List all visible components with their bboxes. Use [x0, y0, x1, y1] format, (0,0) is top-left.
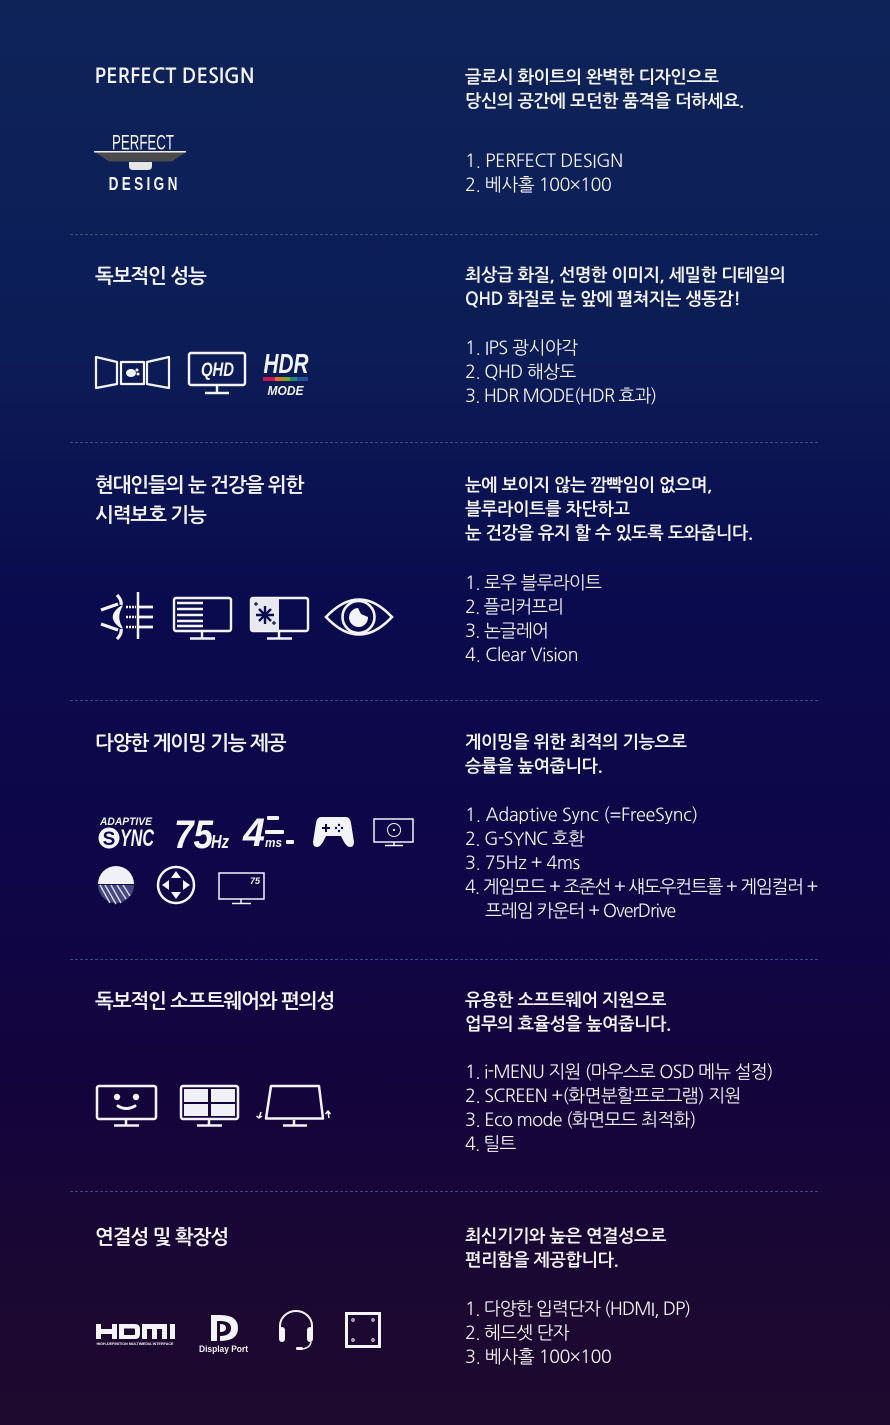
icon: IPS wide viewing angle — [96, 357, 169, 388]
list: gaming — [465, 806, 818, 920]
icon: QHD monitor: QHD — [201, 360, 234, 381]
heading: eye care: 현대인들의 눈 건강을 위한 — [95, 475, 303, 495]
icon: VESA mount — [346, 1314, 380, 1346]
icon: HDMI logo — [96, 1324, 175, 1346]
summary: eye care: 블루라이트를 차단하고 — [465, 500, 630, 518]
icon: crosshair monitor — [374, 819, 413, 846]
icon: clear vision eye — [326, 600, 392, 634]
list: software — [465, 1062, 773, 1152]
icon: flicker free monitor — [174, 598, 231, 638]
summary: performance — [465, 266, 785, 308]
summary: perfect design: 당신의 공간에 모던한 품격을 더하세요. — [465, 92, 744, 110]
list: gaming: 3. 75Hz + 4ms — [465, 854, 580, 872]
list: eye care — [465, 574, 602, 664]
list: software: 3. Eco mode (화면모드 최적화) — [465, 1110, 696, 1128]
summary: connectivity: 편리함을 제공합니다. — [465, 1251, 618, 1269]
list: perfect design: 2. 베사홀 100×100 — [465, 176, 611, 194]
list: performance: 1. IPS 광시야각 — [465, 338, 578, 356]
heading: perfect design: PERFECT DESIGN — [94, 66, 254, 86]
icon: shadow control — [98, 866, 134, 904]
heading: performance: 독보적인 성능 — [95, 266, 206, 286]
heading: connectivity: 연결성 및 확장성 — [95, 1227, 228, 1247]
icon: low blue light eye — [101, 592, 153, 639]
icon: smile monitor — [97, 1086, 156, 1126]
icon: frame counter monitor: 75 — [250, 876, 261, 886]
summary: eye care — [465, 476, 753, 542]
summary: gaming — [465, 733, 687, 775]
list: performance: 2. QHD 해상도 — [465, 362, 576, 380]
icon: 75Hz: Hz — [211, 832, 229, 852]
list: eye care: 4. Clear Vision — [465, 646, 578, 664]
summary: eye care: 눈에 보이지 않는 깜빡임이 없으며, — [465, 476, 712, 494]
list: gaming: 4. 게임모드 + 조준선 + 섀도우컨트롤 + 게임컬러 + — [465, 878, 817, 896]
summary: eye care: 눈 건강을 유지 할 수 있도록 도와줍니다. — [465, 524, 753, 542]
icon: DisplayPort logo: Display Port — [199, 1344, 249, 1355]
summary: performance: QHD 화질로 눈 앞에 펼쳐지는 생동감! — [465, 290, 740, 308]
list: eye care: 1. 로우 블루라이트 — [465, 574, 601, 592]
summary: connectivity: 최신기기와 높은 연결성으로 — [465, 1227, 666, 1245]
summary: gaming: 승률을 높여줍니다. — [465, 757, 602, 775]
list: eye care: 3. 논글레어 — [465, 622, 548, 640]
list: gaming: 1. Adaptive Sync (=FreeSync) — [465, 806, 698, 824]
list: performance — [465, 338, 656, 404]
list: gaming: 2. G-SYNC 호환 — [465, 830, 584, 848]
icon: adaptive sync: YNC — [120, 825, 154, 852]
icon: screen split monitor — [181, 1086, 238, 1126]
icon: 4ms: ms — [265, 835, 282, 850]
list: software: 4. 틸트 — [465, 1134, 515, 1152]
summary: perfect design: 글로시 화이트의 완벽한 디자인으로 — [465, 68, 719, 86]
list: connectivity: 1. 다양한 입력단자 (HDMI, DP) — [465, 1300, 690, 1318]
list: connectivity: 3. 베사홀 100×100 — [465, 1348, 611, 1366]
icon: HDMI logo: HIGH-DEFINITION MULTIMEDIA INTERFACE — [96, 1341, 174, 1346]
icon: QHD monitor — [189, 353, 245, 393]
icon: 75Hz: 75 — [174, 813, 214, 857]
summary: connectivity — [465, 1227, 666, 1269]
icon: HDR mode: HDR — [264, 348, 309, 379]
icon: headset — [279, 1311, 313, 1350]
heading: gaming: 다양한 게이밍 기능 제공 — [95, 733, 286, 753]
icon: frame counter monitor — [219, 873, 264, 904]
list: connectivity: 2. 헤드셋 단자 — [465, 1324, 569, 1342]
icon: tilt monitor — [256, 1086, 330, 1126]
icon: gamepad — [313, 817, 354, 847]
summary: gaming: 게이밍을 위한 최적의 기능으로 — [465, 733, 687, 751]
summary: software — [465, 991, 671, 1033]
list: software: 2. SCREEN +(화면분할프로그램) 지원 — [465, 1086, 741, 1104]
icon: 4ms — [242, 811, 294, 855]
icon: HDR mode: MODE — [268, 383, 304, 398]
icon: adaptive sync: ADAPTIVE — [99, 816, 153, 828]
summary: performance: 최상급 화질, 선명한 이미지, 세밀한 디테일의 — [465, 266, 785, 284]
icon: navigation dial — [158, 867, 194, 903]
list: connectivity — [465, 1300, 690, 1366]
heading: eye care: 시력보호 기능 — [95, 505, 206, 525]
summary: software: 업무의 효율성을 높여줍니다. — [465, 1015, 671, 1033]
icon: perfect design logo: PERFECT — [112, 132, 174, 154]
icon: HDR mode — [263, 348, 309, 398]
summary: perfect design — [465, 68, 744, 110]
icon: DisplayPort logo — [199, 1315, 249, 1355]
icon: 4ms: 4 — [242, 811, 265, 855]
list: gaming: 프레임 카운터 + OverDrive — [485, 902, 675, 920]
icon: perfect design logo: DESIGN — [109, 174, 177, 195]
icon: adaptive sync: S — [103, 829, 115, 850]
icon: perfect design logo — [94, 132, 186, 195]
list: eye care: 2. 플리커프리 — [465, 598, 563, 616]
list: perfect design: 1. PERFECT DESIGN — [465, 152, 623, 170]
list: performance: 3. HDR MODE(HDR 효과) — [465, 386, 656, 404]
icon: non glare monitor — [251, 598, 308, 638]
summary: software: 유용한 소프트웨어 지원으로 — [465, 991, 666, 1009]
heading: software: 독보적인 소프트웨어와 편의성 — [95, 991, 334, 1011]
list: software: 1. i-MENU 지원 (마우스로 OSD 메뉴 설정) — [465, 1062, 773, 1080]
list: perfect design — [465, 152, 623, 194]
heading: eye care — [95, 475, 304, 525]
icon: adaptive sync — [98, 816, 154, 852]
